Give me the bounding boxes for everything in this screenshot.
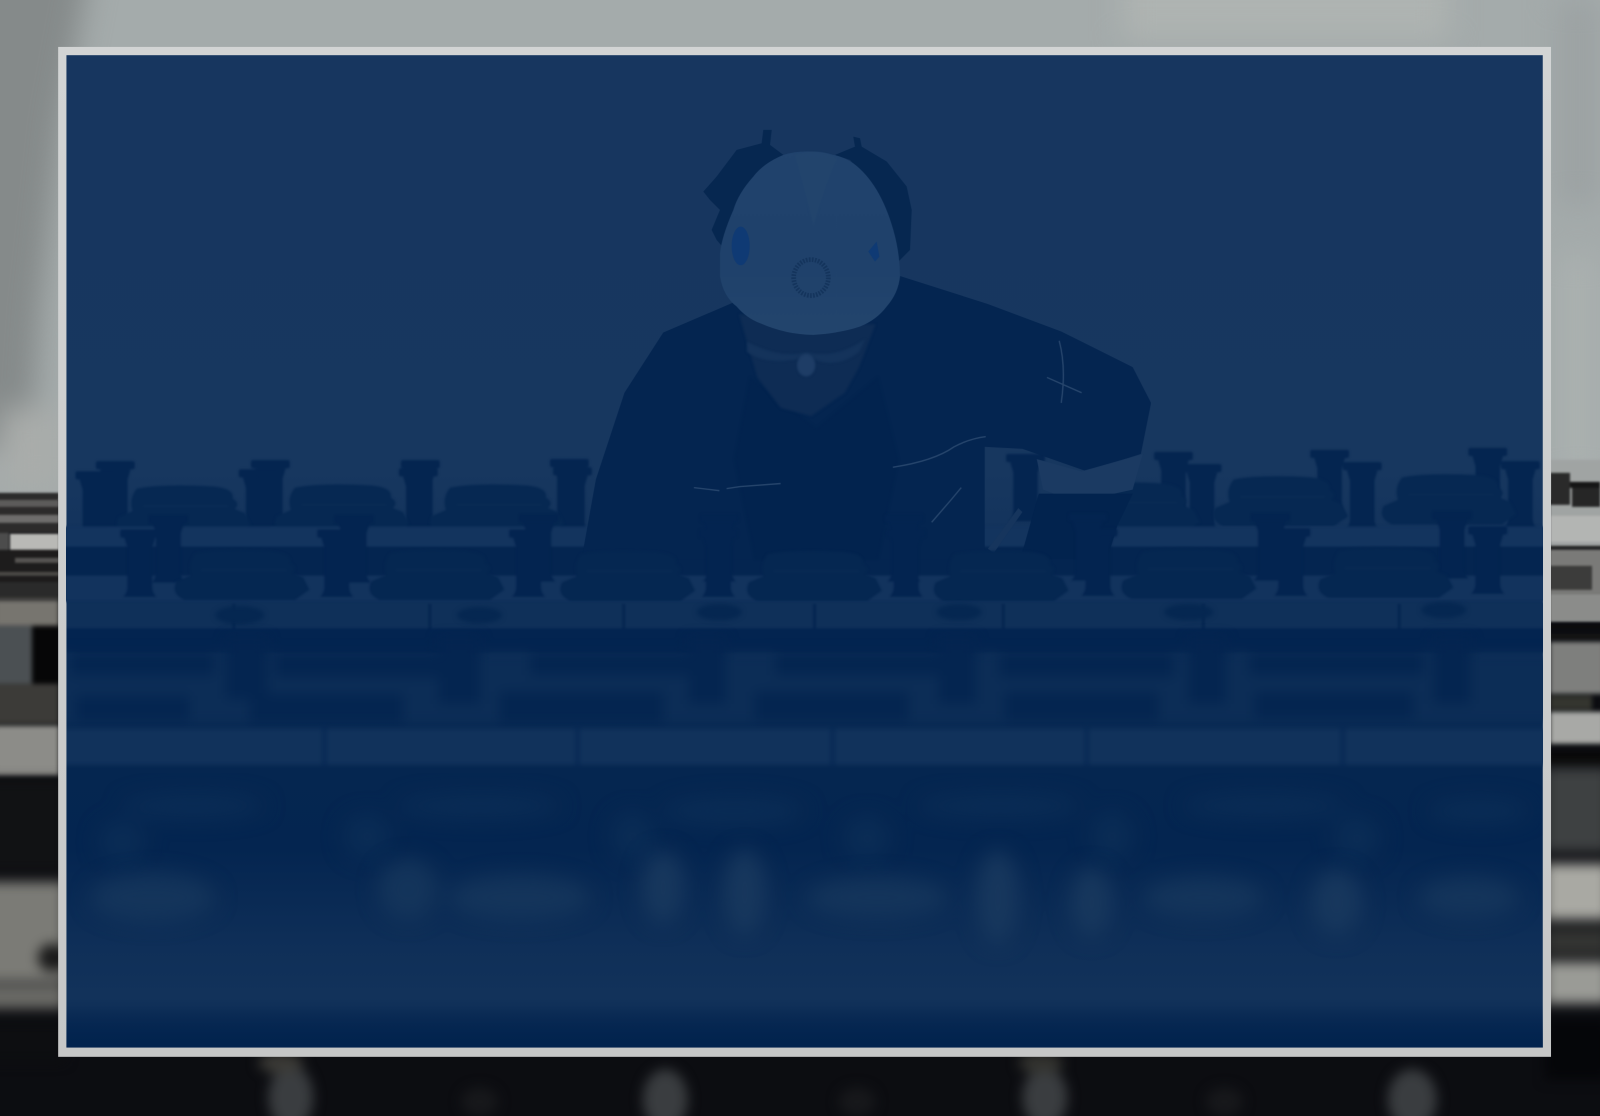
- blurred fourth row deck: [46, 726, 1566, 765]
- bottom blurred spools: [258, 1053, 1437, 1116]
- nose: [797, 354, 815, 376]
- blurred third row: [1542, 652, 1543, 729]
- inner shirt: [735, 377, 898, 559]
- front spools: [120, 524, 1507, 597]
- hat right sticker: [868, 242, 879, 262]
- goggles: [747, 345, 751, 353]
- helmet with ear muffs: [703, 130, 912, 335]
- glove: [1024, 494, 1117, 547]
- jacket seams: [694, 341, 1082, 522]
- right photo strip: [1545, 460, 1600, 1080]
- ear muff right: [835, 137, 912, 263]
- blurred mottled row: [98, 794, 1531, 862]
- hat centre ridge: [795, 152, 837, 227]
- sleeve cuff: [1037, 459, 1134, 494]
- left photo strip: [0, 493, 66, 1062]
- bottom shade of panel: [66, 1012, 1543, 1048]
- jacket: [582, 275, 1151, 559]
- blurred foreground highlights: [104, 852, 1504, 930]
- deck spool feet: [218, 604, 1464, 622]
- hat ring logo: [794, 260, 828, 296]
- back row of cushions: [128, 474, 1508, 526]
- back row of spools: [75, 448, 1540, 526]
- hat left sticker: [732, 227, 750, 265]
- hard hat: [720, 151, 900, 335]
- worker: [582, 130, 1151, 559]
- ear muff left: [703, 130, 783, 252]
- front cushions: [175, 548, 1453, 601]
- face: [739, 314, 876, 416]
- table front deck: [56, 602, 1556, 653]
- pen in hand: [988, 508, 1022, 553]
- equipment table upper deck: [56, 526, 1556, 602]
